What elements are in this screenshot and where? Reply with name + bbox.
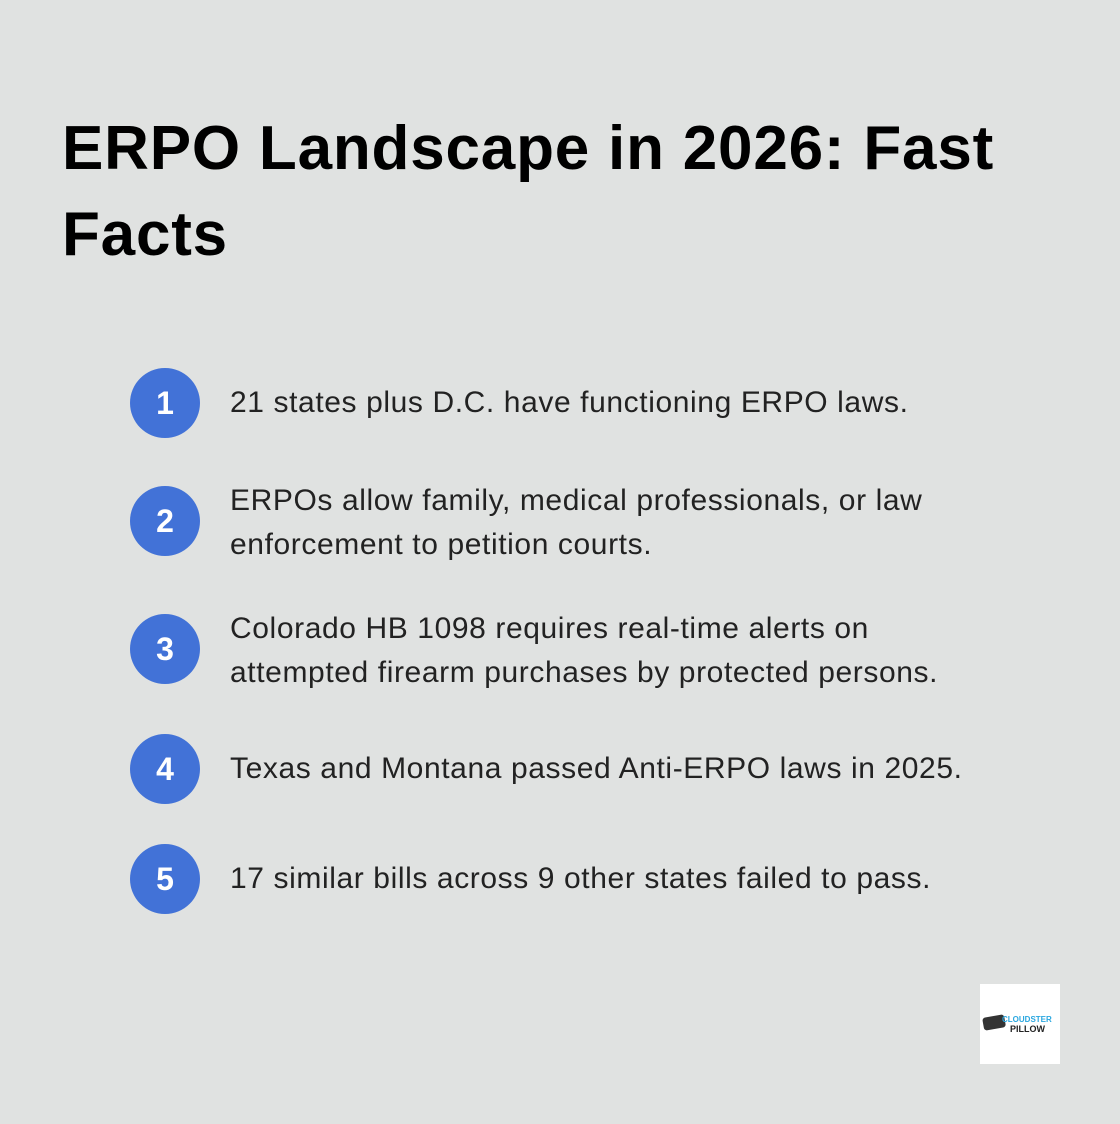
text 3 bbox=[230, 612, 938, 689]
icon: number 5 bbox=[130, 844, 200, 914]
title: ERPO Landscape in 2026: Fast Facts bbox=[62, 114, 994, 269]
icon: number 3 bbox=[130, 614, 200, 684]
icon: number 4 bbox=[130, 734, 200, 804]
text 4: Texas and Montana passed Anti-ERPO laws in 2025. bbox=[230, 752, 963, 785]
text 2: ERPOs allow family, medical professionals, or law bbox=[230, 484, 922, 517]
item 2 bbox=[130, 484, 922, 561]
text 3: attempted firearm purchases by protected persons. bbox=[230, 656, 938, 689]
text 2 bbox=[230, 484, 922, 561]
text 5: 17 similar bills across 9 other states failed to pass. bbox=[230, 862, 931, 895]
logo: CLOUDSTER bbox=[1002, 1015, 1052, 1024]
icon: number 4: 4 bbox=[156, 751, 174, 787]
text 3: Colorado HB 1098 requires real-time alerts on bbox=[230, 612, 869, 645]
icon: number 3: 3 bbox=[156, 631, 174, 667]
icon: number 1: 1 bbox=[156, 385, 174, 421]
icon: number 1 bbox=[130, 368, 200, 438]
text 2: enforcement to petition courts. bbox=[230, 528, 652, 561]
icon: number 2 bbox=[130, 486, 200, 556]
item 3 bbox=[130, 612, 938, 689]
icon: number 2: 2 bbox=[156, 503, 174, 539]
item 5 bbox=[130, 844, 931, 914]
icon: number 5: 5 bbox=[156, 861, 174, 897]
item 1 bbox=[130, 368, 909, 438]
logo bbox=[980, 984, 1060, 1064]
text 1: 21 states plus D.C. have functioning ERPO laws. bbox=[230, 386, 909, 419]
logo: PILLOW bbox=[1010, 1024, 1045, 1034]
item 4 bbox=[130, 734, 963, 804]
